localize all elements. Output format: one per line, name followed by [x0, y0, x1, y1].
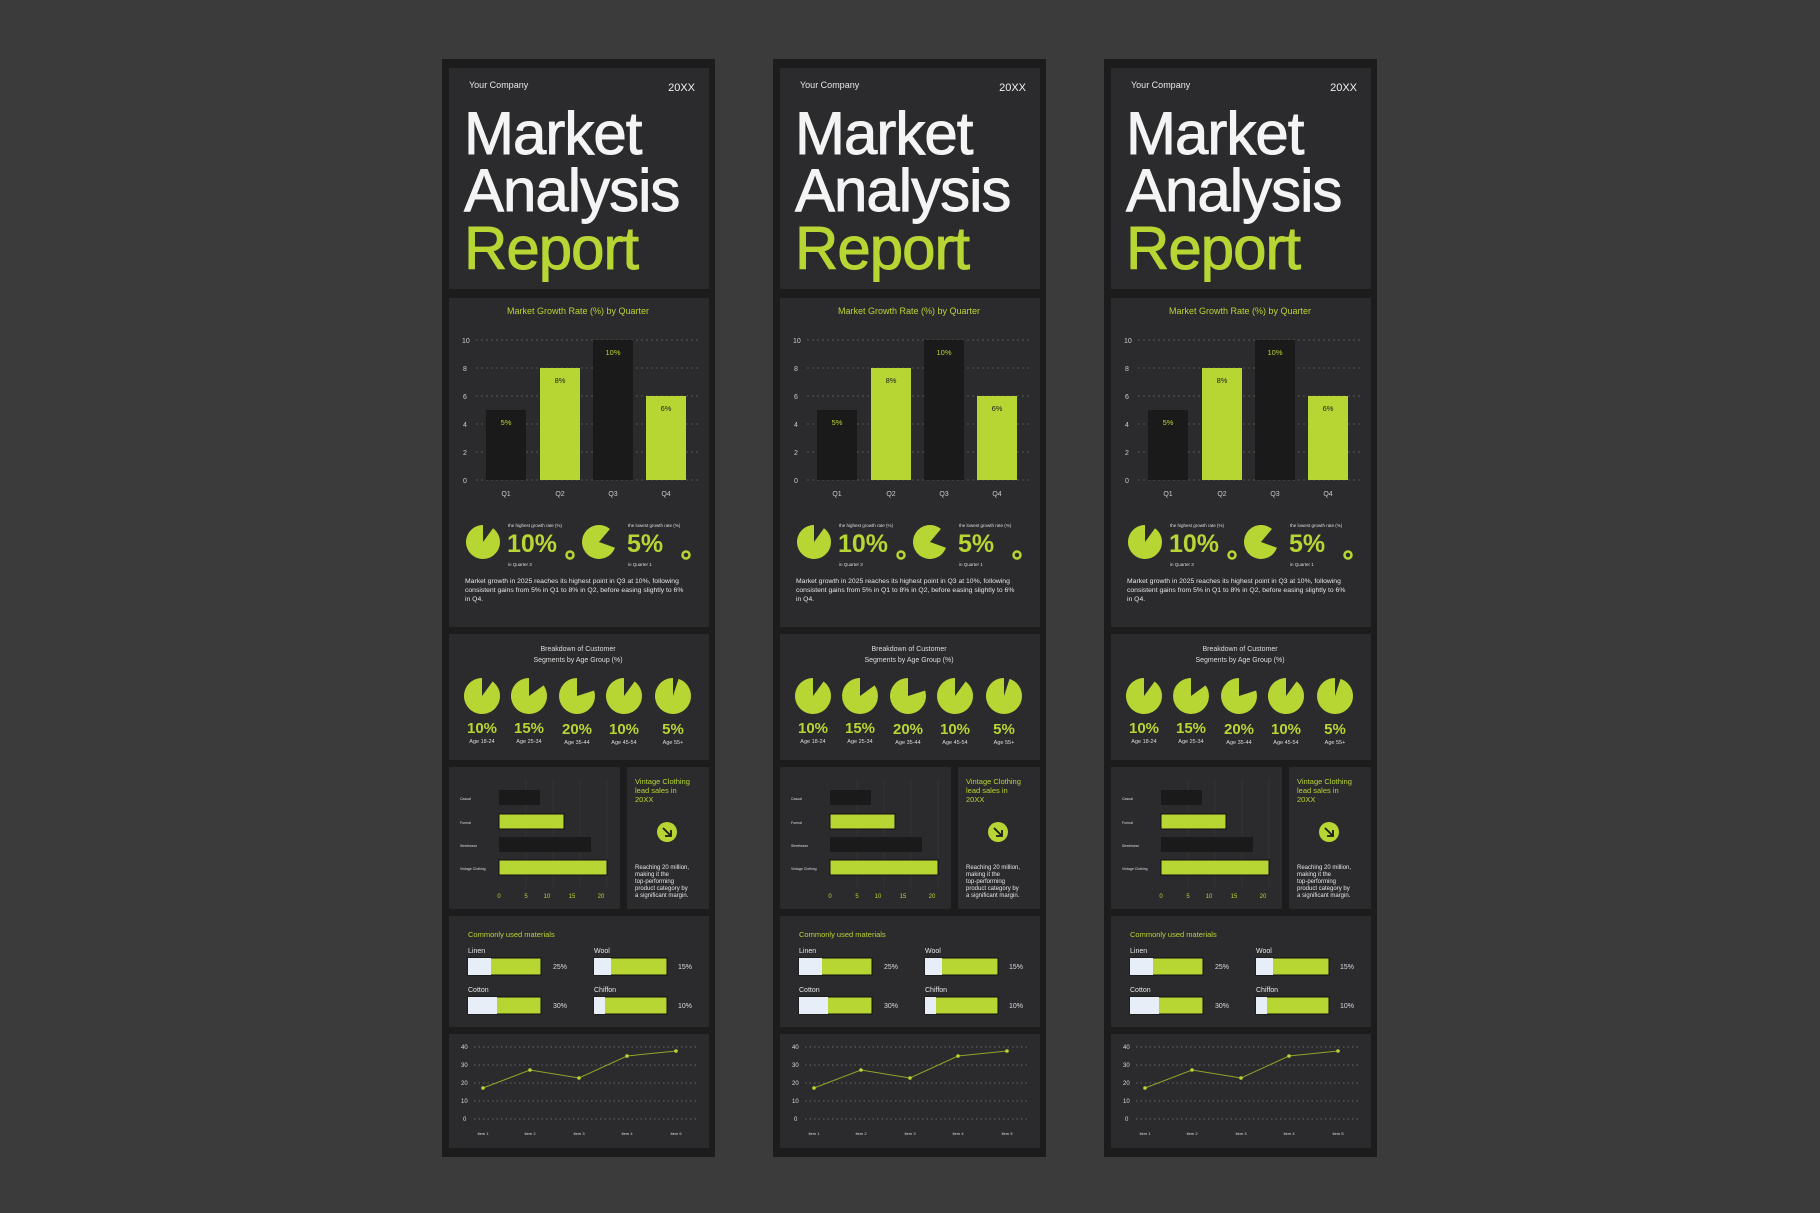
panel: bar chart quarterly growth: in Q4. — [796, 596, 814, 603]
panel: category bar chart: 0 — [497, 894, 501, 900]
panel: age group pies: 10% — [1271, 721, 1301, 738]
panel: bar chart quarterly growth: 6 — [463, 394, 467, 401]
header card: Market — [795, 100, 974, 167]
panel: line chart — [780, 1034, 1040, 1148]
panel: vintage callout: lead sales in — [635, 786, 677, 795]
panel: vintage callout: making it the — [966, 872, 1001, 878]
header card: Your Company — [1131, 80, 1191, 90]
panel: category bar chart — [449, 767, 620, 909]
panel: bar chart quarterly growth: 5% — [1163, 418, 1174, 427]
panel: vintage callout: Vintage Clothing — [1297, 777, 1352, 786]
panel: bar chart quarterly growth: 8% — [555, 376, 566, 385]
panel: report 1 — [442, 59, 715, 1157]
panel: bar chart quarterly growth: 10% — [838, 530, 888, 558]
panel: bar chart quarterly growth: Q4 — [661, 491, 671, 498]
panel: vintage callout: 20XX — [966, 795, 984, 804]
panel: materials: 15% — [1009, 964, 1023, 971]
panel: bar chart quarterly growth: 8 — [463, 366, 467, 373]
panel: line chart: 0 — [463, 1117, 467, 1123]
panel: bar chart quarterly growth: 0 — [794, 478, 798, 485]
panel: line chart: 20 — [1123, 1081, 1130, 1087]
panel: category bar chart: Streetwear — [791, 844, 809, 848]
panel: age group pies: Breakdown of Customer — [540, 646, 616, 653]
panel: materials: Wool — [925, 948, 941, 955]
panel: category bar chart: 5 — [1186, 894, 1190, 900]
panel: bar chart quarterly growth: in Quarter 3 — [508, 562, 532, 567]
panel: vintage callout — [1289, 767, 1371, 909]
panel: bar chart quarterly growth: Market Growth Rate (%) by Quarter — [507, 306, 649, 316]
panel: bar chart quarterly growth: Market Growth Rate (%) by Quarter — [1169, 306, 1311, 316]
panel: bar chart quarterly growth: 0 — [1125, 478, 1129, 485]
panel: bar chart quarterly growth: 6 — [794, 394, 798, 401]
panel: bar chart quarterly growth: Q4 — [992, 491, 1002, 498]
panel: line chart: Item 5 — [670, 1131, 682, 1136]
panel: line chart: Item 1 — [1139, 1131, 1151, 1136]
panel: age group pies: Age 18-24 — [800, 739, 826, 745]
panel: line chart: Item 3 — [904, 1131, 916, 1136]
panel: bar chart quarterly growth: in Quarter 1 — [959, 562, 983, 567]
panel: line chart: Item 5 — [1001, 1131, 1013, 1136]
panel: vintage callout: Reaching 20 million, — [966, 865, 1020, 871]
header card: Analysis — [464, 157, 679, 224]
panel: line chart: Item 2 — [855, 1131, 867, 1136]
panel: materials — [780, 916, 1040, 1027]
panel: bar chart quarterly growth: Q2 — [886, 491, 896, 498]
panel: age group pies: Age 55+ — [1325, 740, 1345, 746]
panel: age group pies: 15% — [845, 720, 875, 737]
panel: bar chart quarterly growth: 6% — [992, 404, 1003, 413]
panel: line chart: 40 — [461, 1045, 468, 1051]
panel: line chart — [1111, 1034, 1371, 1148]
panel: bar chart quarterly growth: consistent gains from 5% in Q1 to 8% in Q2, before easing slightly to 6% — [796, 587, 1014, 594]
panel: age group pies: 15% — [514, 720, 544, 737]
panel: age group pies: Age 45-54 — [611, 740, 637, 746]
header card: Report — [795, 215, 970, 282]
panel: bar chart quarterly growth: in Q4. — [465, 596, 483, 603]
panel: bar chart quarterly growth: Q1 — [1163, 491, 1173, 498]
panel: bar chart quarterly growth: the highest growth rate (%) — [508, 523, 563, 528]
panel: bar chart quarterly growth: 2 — [1125, 450, 1129, 457]
panel: line chart: 10 — [461, 1099, 468, 1105]
panel: vintage callout: product category by — [1297, 886, 1350, 892]
panel: category bar chart: Casual — [1122, 797, 1133, 801]
panel: bar chart quarterly growth: in Quarter 1 — [1290, 562, 1314, 567]
header card: Market — [1126, 100, 1305, 167]
panel: bar chart quarterly growth: in Quarter 3 — [1170, 562, 1194, 567]
panel: category bar chart: 0 — [828, 894, 832, 900]
panel: bar chart quarterly growth: Q3 — [608, 491, 618, 498]
panel: materials: Cotton — [1130, 987, 1151, 994]
panel: bar chart quarterly growth: 5% — [501, 418, 512, 427]
panel: materials: Commonly used materials — [799, 930, 886, 939]
panel: line chart: Item 4 — [952, 1131, 964, 1136]
panel: materials: Commonly used materials — [468, 930, 555, 939]
panel: bar chart quarterly growth: 6% — [1323, 404, 1334, 413]
panel: category bar chart: 10 — [544, 894, 551, 900]
header card: Your Company — [800, 80, 860, 90]
panel: bar chart quarterly growth: 8 — [794, 366, 798, 373]
panel: category bar chart — [780, 767, 951, 909]
panel: vintage callout: Reaching 20 million, — [635, 865, 689, 871]
panel: bar chart quarterly growth: 0 — [463, 478, 467, 485]
panel: bar chart quarterly growth: in Quarter 3 — [839, 562, 863, 567]
panel: bar chart quarterly growth: 10 — [1124, 338, 1132, 345]
panel: materials: Wool — [1256, 948, 1272, 955]
panel: bar chart quarterly growth — [780, 298, 1040, 627]
panel: age group pies — [780, 634, 1040, 760]
panel: age group pies — [449, 634, 709, 760]
panel: age group pies: 20% — [562, 721, 592, 738]
panel: age group pies: Age 18-24 — [469, 739, 495, 745]
panel: bar chart quarterly growth: 8% — [886, 376, 897, 385]
panel: vintage callout: lead sales in — [1297, 786, 1339, 795]
panel: line chart: 0 — [1125, 1117, 1129, 1123]
panel: bar chart quarterly growth: 5% — [958, 530, 994, 558]
panel: age group pies: 5% — [993, 721, 1015, 738]
panel: age group pies — [1111, 634, 1371, 760]
panel: age group pies: Age 35-44 — [1226, 740, 1252, 746]
header card: Analysis — [795, 157, 1010, 224]
panel: age group pies: 5% — [662, 721, 684, 738]
panel: line chart: Item 5 — [1332, 1131, 1344, 1136]
panel: bar chart quarterly growth: Market growth in 2025 reaches its highest point in Q3 at 10%, following — [1127, 578, 1341, 585]
panel: vintage callout: Reaching 20 million, — [1297, 865, 1351, 871]
header card: Report — [1126, 215, 1301, 282]
panel: materials: 30% — [553, 1003, 567, 1010]
panel: bar chart quarterly growth: 2 — [794, 450, 798, 457]
panel: line chart: 20 — [461, 1081, 468, 1087]
panel: bar chart quarterly growth: Q3 — [939, 491, 949, 498]
panel: materials: Linen — [468, 948, 485, 955]
panel: bar chart quarterly growth: 10% — [1169, 530, 1219, 558]
panel: bar chart quarterly growth: Q2 — [555, 491, 565, 498]
panel: line chart: Item 4 — [1283, 1131, 1295, 1136]
panel: age group pies: Age 45-54 — [1273, 740, 1299, 746]
panel: line chart: Item 2 — [1186, 1131, 1198, 1136]
panel: vintage callout: making it the — [1297, 872, 1332, 878]
panel: age group pies: Age 45-54 — [942, 740, 968, 746]
panel: materials: Cotton — [468, 987, 489, 994]
panel: age group pies: 5% — [1324, 721, 1346, 738]
panel: bar chart quarterly growth: 4 — [463, 422, 467, 429]
panel: bar chart quarterly growth: in Quarter 1 — [628, 562, 652, 567]
panel: category bar chart: 15 — [569, 894, 576, 900]
panel: age group pies: Age 35-44 — [895, 740, 921, 746]
panel: materials: 25% — [1215, 964, 1229, 971]
panel: materials: Linen — [799, 948, 816, 955]
panel: bar chart quarterly growth: Q2 — [1217, 491, 1227, 498]
panel: age group pies: Age 25-34 — [847, 739, 873, 745]
panel: bar chart quarterly growth: Market growth in 2025 reaches its highest point in Q3 at 10%, following — [465, 578, 679, 585]
panel: materials: Wool — [594, 948, 610, 955]
panel: category bar chart: 10 — [1206, 894, 1213, 900]
panel: vintage callout — [958, 767, 1040, 909]
panel: bar chart quarterly growth: 10% — [1267, 348, 1283, 357]
panel: category bar chart: 15 — [900, 894, 907, 900]
panel: line chart: Item 2 — [524, 1131, 536, 1136]
panel: vintage callout: lead sales in — [966, 786, 1008, 795]
header card: 20XX — [668, 82, 696, 94]
panel: category bar chart: 20 — [598, 894, 605, 900]
panel: category bar chart: 0 — [1159, 894, 1163, 900]
panel: materials: Commonly used materials — [1130, 930, 1217, 939]
panel: age group pies: Segments by Age Group (%) — [533, 657, 623, 664]
panel: bar chart quarterly growth: Q1 — [832, 491, 842, 498]
panel: line chart: 30 — [461, 1063, 468, 1069]
panel: line chart: Item 3 — [573, 1131, 585, 1136]
panel: bar chart quarterly growth: consistent gains from 5% in Q1 to 8% in Q2, before easing slightly to 6% — [1127, 587, 1345, 594]
panel: category bar chart: 20 — [1260, 894, 1267, 900]
panel: materials: 10% — [1009, 1003, 1023, 1010]
panel: bar chart quarterly growth: 5% — [627, 530, 663, 558]
panel: vintage callout: making it the — [635, 872, 670, 878]
panel: age group pies: Age 55+ — [994, 740, 1014, 746]
panel: line chart: 0 — [794, 1117, 798, 1123]
panel: bar chart quarterly growth: 8% — [1217, 376, 1228, 385]
panel: bar chart quarterly growth: the lowest growth rate (%) — [628, 523, 681, 528]
panel: bar chart quarterly growth: 10% — [605, 348, 621, 357]
header card: Market — [464, 100, 643, 167]
panel: category bar chart: Formal — [1122, 821, 1133, 825]
panel: age group pies: 20% — [893, 721, 923, 738]
header card — [1111, 68, 1371, 289]
panel: materials: 10% — [678, 1003, 692, 1010]
panel: category bar chart: Formal — [460, 821, 471, 825]
header card: 20XX — [1330, 82, 1358, 94]
panel: category bar chart: Vintage Clothing — [460, 867, 486, 871]
panel: bar chart quarterly growth: 10% — [507, 530, 557, 558]
panel: bar chart quarterly growth: Market growth in 2025 reaches its highest point in Q3 at 10%, following — [796, 578, 1010, 585]
panel: age group pies: Segments by Age Group (%) — [1195, 657, 1285, 664]
panel: bar chart quarterly growth: 4 — [794, 422, 798, 429]
panel: age group pies: 10% — [798, 720, 828, 737]
panel: bar chart quarterly growth: 10 — [793, 338, 801, 345]
panel: line chart: 30 — [1123, 1063, 1130, 1069]
panel: category bar chart — [1111, 767, 1282, 909]
panel: materials: 25% — [884, 964, 898, 971]
panel: bar chart quarterly growth: Q3 — [1270, 491, 1280, 498]
panel: vintage callout: Vintage Clothing — [966, 777, 1021, 786]
panel: bar chart quarterly growth: the highest growth rate (%) — [1170, 523, 1225, 528]
header card: 20XX — [999, 82, 1027, 94]
panel: report 3 — [1104, 59, 1377, 1157]
panel: age group pies: Segments by Age Group (%) — [864, 657, 954, 664]
panel: bar chart quarterly growth: Market Growth Rate (%) by Quarter — [838, 306, 980, 316]
panel: bar chart quarterly growth: consistent gains from 5% in Q1 to 8% in Q2, before easing slightly to 6% — [465, 587, 683, 594]
panel: category bar chart: Vintage Clothing — [791, 867, 817, 871]
panel: category bar chart: 20 — [929, 894, 936, 900]
panel: bar chart quarterly growth: in Q4. — [1127, 596, 1145, 603]
panel: bar chart quarterly growth: 5% — [1289, 530, 1325, 558]
panel: bar chart quarterly growth: the lowest growth rate (%) — [1290, 523, 1343, 528]
panel: materials: 10% — [1340, 1003, 1354, 1010]
panel: bar chart quarterly growth: 6% — [661, 404, 672, 413]
panel: category bar chart: 10 — [875, 894, 882, 900]
panel: category bar chart: Casual — [460, 797, 471, 801]
panel: vintage callout: a significant margin. — [1297, 893, 1351, 899]
panel: materials — [1111, 916, 1371, 1027]
panel: vintage callout: Vintage Clothing — [635, 777, 690, 786]
panel: bar chart quarterly growth: Q4 — [1323, 491, 1333, 498]
panel: bar chart quarterly growth: the lowest growth rate (%) — [959, 523, 1012, 528]
panel: category bar chart: Vintage Clothing — [1122, 867, 1148, 871]
panel: materials: 30% — [1215, 1003, 1229, 1010]
panel: category bar chart: Streetwear — [460, 844, 478, 848]
panel: line chart: 10 — [1123, 1099, 1130, 1105]
panel: materials: 15% — [1340, 964, 1354, 971]
panel: materials: 15% — [678, 964, 692, 971]
panel: bar chart quarterly growth: 8 — [1125, 366, 1129, 373]
panel: bar chart quarterly growth: Q1 — [501, 491, 511, 498]
panel: line chart: 30 — [792, 1063, 799, 1069]
panel: bar chart quarterly growth — [449, 298, 709, 627]
panel: materials: Chiffon — [594, 987, 616, 994]
panel: materials: Chiffon — [925, 987, 947, 994]
panel: bar chart quarterly growth: 10 — [462, 338, 470, 345]
panel: line chart: 40 — [792, 1045, 799, 1051]
panel: vintage callout: a significant margin. — [966, 893, 1020, 899]
panel: bar chart quarterly growth — [1111, 298, 1371, 627]
header card: Report — [464, 215, 639, 282]
panel: bar chart quarterly growth: 10% — [936, 348, 952, 357]
panel: vintage callout: 20XX — [1297, 795, 1315, 804]
panel: vintage callout: top-performing — [1297, 879, 1336, 885]
panel: bar chart quarterly growth: 4 — [1125, 422, 1129, 429]
header card — [449, 68, 709, 289]
panel: vintage callout: top-performing — [966, 879, 1005, 885]
panel: age group pies: 10% — [609, 721, 639, 738]
panel: age group pies: Age 55+ — [663, 740, 683, 746]
panel: age group pies: 10% — [940, 721, 970, 738]
panel: line chart: Item 4 — [621, 1131, 633, 1136]
panel: materials: 25% — [553, 964, 567, 971]
panel: bar chart quarterly growth: the highest growth rate (%) — [839, 523, 894, 528]
panel: materials: Linen — [1130, 948, 1147, 955]
panel: age group pies: Age 25-34 — [516, 739, 542, 745]
panel: age group pies: Breakdown of Customer — [1202, 646, 1278, 653]
panel: vintage callout: product category by — [966, 886, 1019, 892]
panel: age group pies: Age 25-34 — [1178, 739, 1204, 745]
panel: vintage callout: a significant margin. — [635, 893, 689, 899]
panel: line chart: 20 — [792, 1081, 799, 1087]
panel: bar chart quarterly growth: 5% — [832, 418, 843, 427]
panel: category bar chart: 5 — [524, 894, 528, 900]
panel: category bar chart: Streetwear — [1122, 844, 1140, 848]
panel: bar chart quarterly growth: 6 — [1125, 394, 1129, 401]
panel: materials: Chiffon — [1256, 987, 1278, 994]
panel: materials — [449, 916, 709, 1027]
header card: Your Company — [469, 80, 529, 90]
panel: age group pies: 15% — [1176, 720, 1206, 737]
panel: vintage callout: top-performing — [635, 879, 674, 885]
panel: materials: 30% — [884, 1003, 898, 1010]
panel: category bar chart: 15 — [1231, 894, 1238, 900]
panel: category bar chart: Casual — [791, 797, 802, 801]
panel: bar chart quarterly growth: 2 — [463, 450, 467, 457]
panel: category bar chart: 5 — [855, 894, 859, 900]
panel: age group pies: 20% — [1224, 721, 1254, 738]
panel: age group pies: Breakdown of Customer — [871, 646, 947, 653]
header card: Analysis — [1126, 157, 1341, 224]
panel: report 2 — [773, 59, 1046, 1157]
panel: line chart: 40 — [1123, 1045, 1130, 1051]
panel: line chart: 10 — [792, 1099, 799, 1105]
panel: line chart: Item 1 — [477, 1131, 489, 1136]
panel: age group pies: Age 35-44 — [564, 740, 590, 746]
panel: materials: Cotton — [799, 987, 820, 994]
header card — [780, 68, 1040, 289]
panel: age group pies: 10% — [1129, 720, 1159, 737]
panel: vintage callout: product category by — [635, 886, 688, 892]
panel: age group pies: Age 18-24 — [1131, 739, 1157, 745]
panel: vintage callout — [627, 767, 709, 909]
panel: vintage callout: 20XX — [635, 795, 653, 804]
panel: line chart: Item 1 — [808, 1131, 820, 1136]
panel: category bar chart: Formal — [791, 821, 802, 825]
panel: line chart: Item 3 — [1235, 1131, 1247, 1136]
panel: line chart — [449, 1034, 709, 1148]
panel: age group pies: 10% — [467, 720, 497, 737]
